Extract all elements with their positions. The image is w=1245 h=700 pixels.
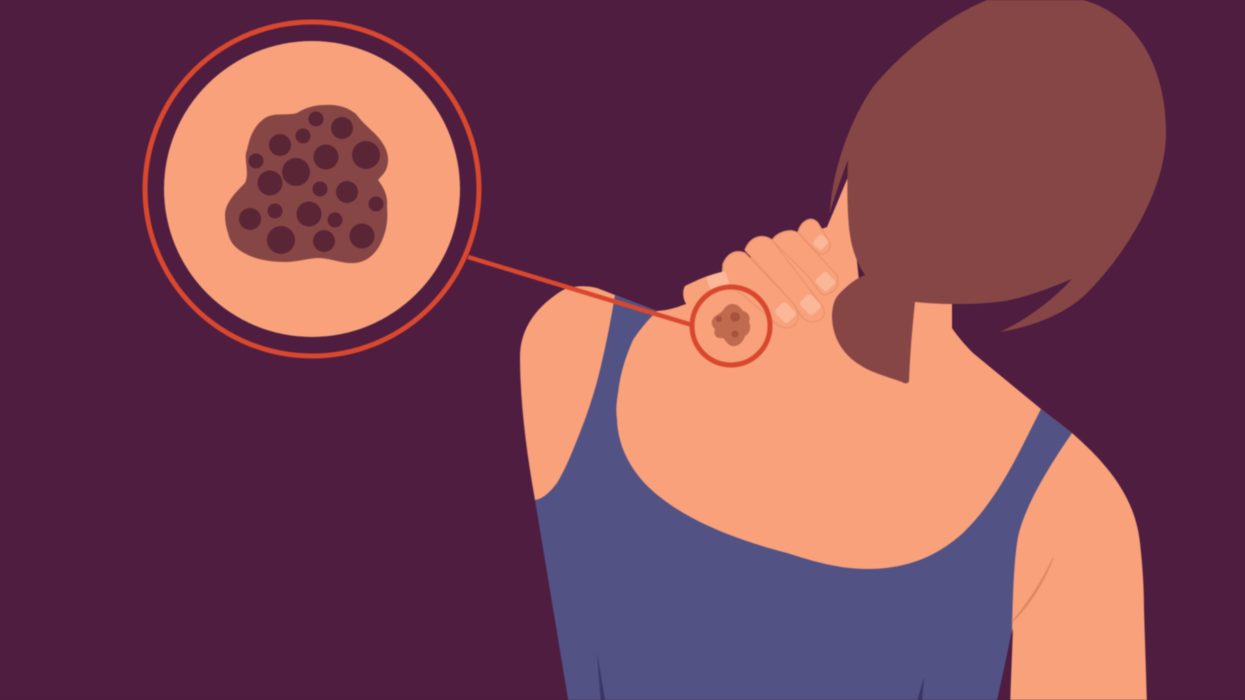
middle finger: [745, 237, 824, 322]
fingernails: [706, 234, 836, 324]
nail 3: [814, 271, 836, 293]
hair: [830, 0, 1166, 383]
top fold right: [916, 677, 924, 700]
index finger: [722, 252, 798, 328]
thumb: [683, 272, 732, 306]
nail 4: [812, 234, 829, 251]
neck and back skin: [520, 177, 1147, 700]
large mole spots: [239, 112, 384, 254]
small mole: [712, 304, 750, 346]
connector line: [468, 257, 692, 325]
hand: [683, 219, 838, 328]
small magnifier ring: [692, 287, 770, 365]
small mole spots: [716, 312, 740, 338]
large magnifier: [145, 22, 479, 356]
skin disc: [164, 41, 460, 337]
ring outline: [692, 287, 770, 365]
nail 1: [774, 301, 797, 324]
ring finger: [772, 231, 838, 295]
gap between top and arm: [996, 628, 1013, 700]
top fold left: [597, 653, 606, 700]
outer ring: [145, 22, 479, 356]
woman figure: [520, 0, 1166, 700]
thumb nail: [706, 271, 730, 291]
little finger: [798, 219, 830, 254]
large mole: [225, 105, 388, 263]
nail 2: [799, 293, 822, 316]
arm crease: [1013, 558, 1053, 621]
tank top: [535, 295, 1072, 700]
